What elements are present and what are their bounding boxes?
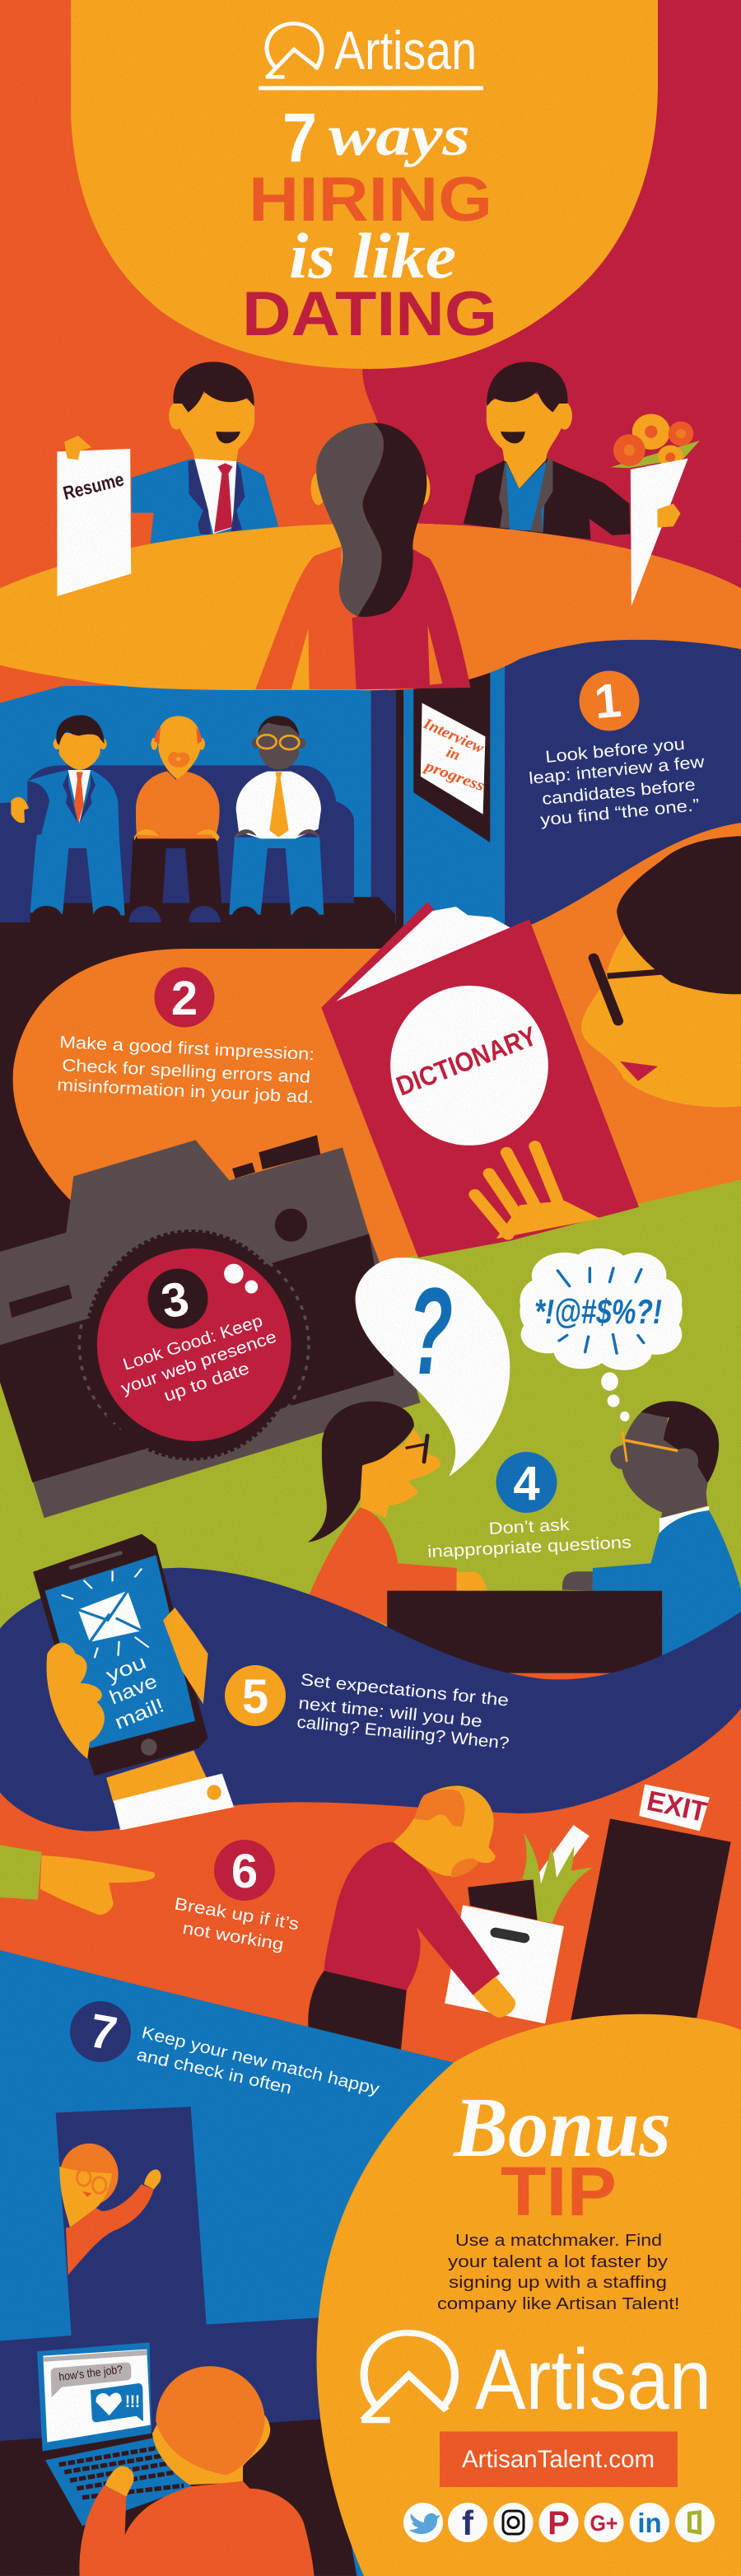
step 4: Don’t ask: [488, 1515, 571, 1538]
step 7: Keep your new match happy: [140, 2023, 382, 2099]
title: is like: [289, 220, 456, 292]
laptop chat text: [58, 2363, 140, 2411]
step 6: [173, 1840, 301, 1954]
social icons: in: [637, 2508, 662, 2538]
step 6: 6: [231, 1845, 258, 1898]
step 2: 2: [171, 972, 198, 1025]
swear symbols: *!@#$%?!: [534, 1292, 662, 1331]
header background: [0, 0, 741, 756]
bonus text: company like Artisan Talent!: [437, 2295, 680, 2313]
interview in progress sign: progress: [421, 757, 487, 795]
step 2: [57, 967, 315, 1107]
illustration: woman from behind: [255, 422, 470, 689]
candidate 1: [11, 715, 125, 917]
step 3: your web presence: [119, 1328, 279, 1398]
step 3: [119, 1268, 279, 1406]
illustration: reader face with glasses: [581, 836, 741, 1107]
illustration: pointing hand: [0, 1845, 155, 1915]
illustration: dismissed man with box: [308, 1785, 593, 2052]
step 1: Look before you: [544, 735, 686, 767]
illustration: blue office with doorway: [0, 1950, 454, 2576]
footer logo: [361, 2332, 711, 2428]
step 1: 1: [592, 674, 623, 729]
laptop chat text: !!!: [125, 2392, 140, 2411]
illustration: exit door: [570, 1785, 731, 2026]
bonus heading: Bonus: [453, 2080, 671, 2175]
step 7: and check in often: [135, 2045, 293, 2098]
interview in progress sign: Interview: [420, 715, 487, 757]
step 3: up to date: [161, 1359, 252, 1406]
bonus heading: TIP: [501, 2153, 617, 2230]
lower orange-red background: [0, 1687, 741, 2074]
title: 7: [282, 99, 317, 176]
illustration: man with bouquet body: [464, 362, 630, 539]
phone message: have: [106, 1670, 161, 1710]
illustration: interviewer woman: [308, 1402, 487, 1625]
navy wave: [0, 1568, 741, 1832]
resume label: Resume: [61, 468, 126, 504]
question mark: ?: [408, 1262, 453, 1400]
candidate 2: [129, 716, 222, 922]
step 5: [225, 1665, 510, 1753]
laptop chat text: how's the job?: [58, 2363, 124, 2383]
doorway and floor: [0, 2107, 357, 2576]
step 3: Look Good: Keep: [120, 1311, 265, 1374]
illustration: man with resume body: [132, 362, 278, 544]
interview in progress sign: in: [444, 744, 462, 764]
social icons: [403, 2503, 715, 2542]
title: DATING: [242, 279, 497, 349]
bonus tip panel: [317, 2014, 741, 2576]
step 2: misinformation in your job ad.: [57, 1076, 315, 1107]
illustration: laptop chat: [37, 2342, 192, 2526]
illustration: dictionary book: [321, 902, 639, 1258]
bonus text: Use a matchmaker. Find: [455, 2232, 662, 2250]
bonus text: your talent a lot faster by: [448, 2253, 668, 2271]
phone message: mail!: [112, 1694, 167, 1734]
step 2: Make a good first impression:: [59, 1033, 315, 1064]
illustration: person at laptop: [79, 2366, 315, 2576]
illustration: camera: [0, 1135, 421, 1518]
candidate 3: [229, 716, 324, 922]
thought cloud: [520, 1248, 683, 1421]
speech bubble: [356, 1258, 510, 1477]
step 4: inappropriate questions: [427, 1533, 631, 1561]
social icons: G+: [590, 2511, 618, 2536]
interview in progress sign: [420, 715, 487, 795]
step 1: leap: interview a few: [528, 753, 706, 788]
footer logo: Artisan: [475, 2332, 711, 2428]
step 7: [70, 2001, 382, 2099]
illustration: waving woman: [59, 2144, 161, 2275]
bonus text: [437, 2232, 680, 2313]
room background: [0, 629, 741, 965]
title: HIRING: [249, 165, 492, 235]
bonus heading: [453, 2080, 671, 2230]
step 5: next time: will you be: [297, 1694, 483, 1731]
step 1: you find “the one.”: [539, 796, 701, 829]
floor and orange wave: [0, 823, 741, 1667]
illustration: phone with mail: [33, 1534, 234, 1830]
website button: ArtisanTalent.com: [462, 2446, 655, 2473]
step 5: Set expectations for the: [300, 1670, 510, 1710]
phone message: [103, 1651, 167, 1734]
exit sign label: EXIT: [644, 1785, 710, 1828]
bonus text: signing up with a staffing: [449, 2274, 667, 2292]
step 3: 3: [157, 1272, 193, 1329]
illustration: interviewed man: [562, 1401, 741, 1658]
title: ways: [329, 105, 470, 168]
dictionary label: DICTIONARY: [392, 1020, 541, 1102]
website button: [440, 2431, 678, 2487]
phone message: you: [103, 1651, 150, 1687]
step 6: not working: [181, 1919, 285, 1954]
social icons: f: [462, 2504, 474, 2542]
step 5: 5: [242, 1670, 268, 1724]
step 5: calling? Emailing? When?: [296, 1713, 510, 1753]
step 6: Break up if it’s: [173, 1894, 301, 1934]
title: [242, 99, 497, 349]
resume paper and hand: [57, 436, 131, 596]
date table: [0, 523, 741, 690]
step 7: 7: [86, 2004, 121, 2061]
sofa and floor: [0, 765, 395, 939]
step 1: [528, 670, 706, 829]
step 4: 4: [513, 1457, 540, 1510]
social icons: P: [548, 2505, 570, 2541]
step 2: Check for spelling errors and: [62, 1056, 311, 1087]
bouquet: [610, 414, 700, 606]
step 1: candidates before: [541, 775, 697, 809]
interview desk: [387, 1591, 662, 1673]
header logo: [259, 20, 483, 91]
step 4: [427, 1452, 631, 1561]
header logo: Artisan: [334, 20, 477, 81]
